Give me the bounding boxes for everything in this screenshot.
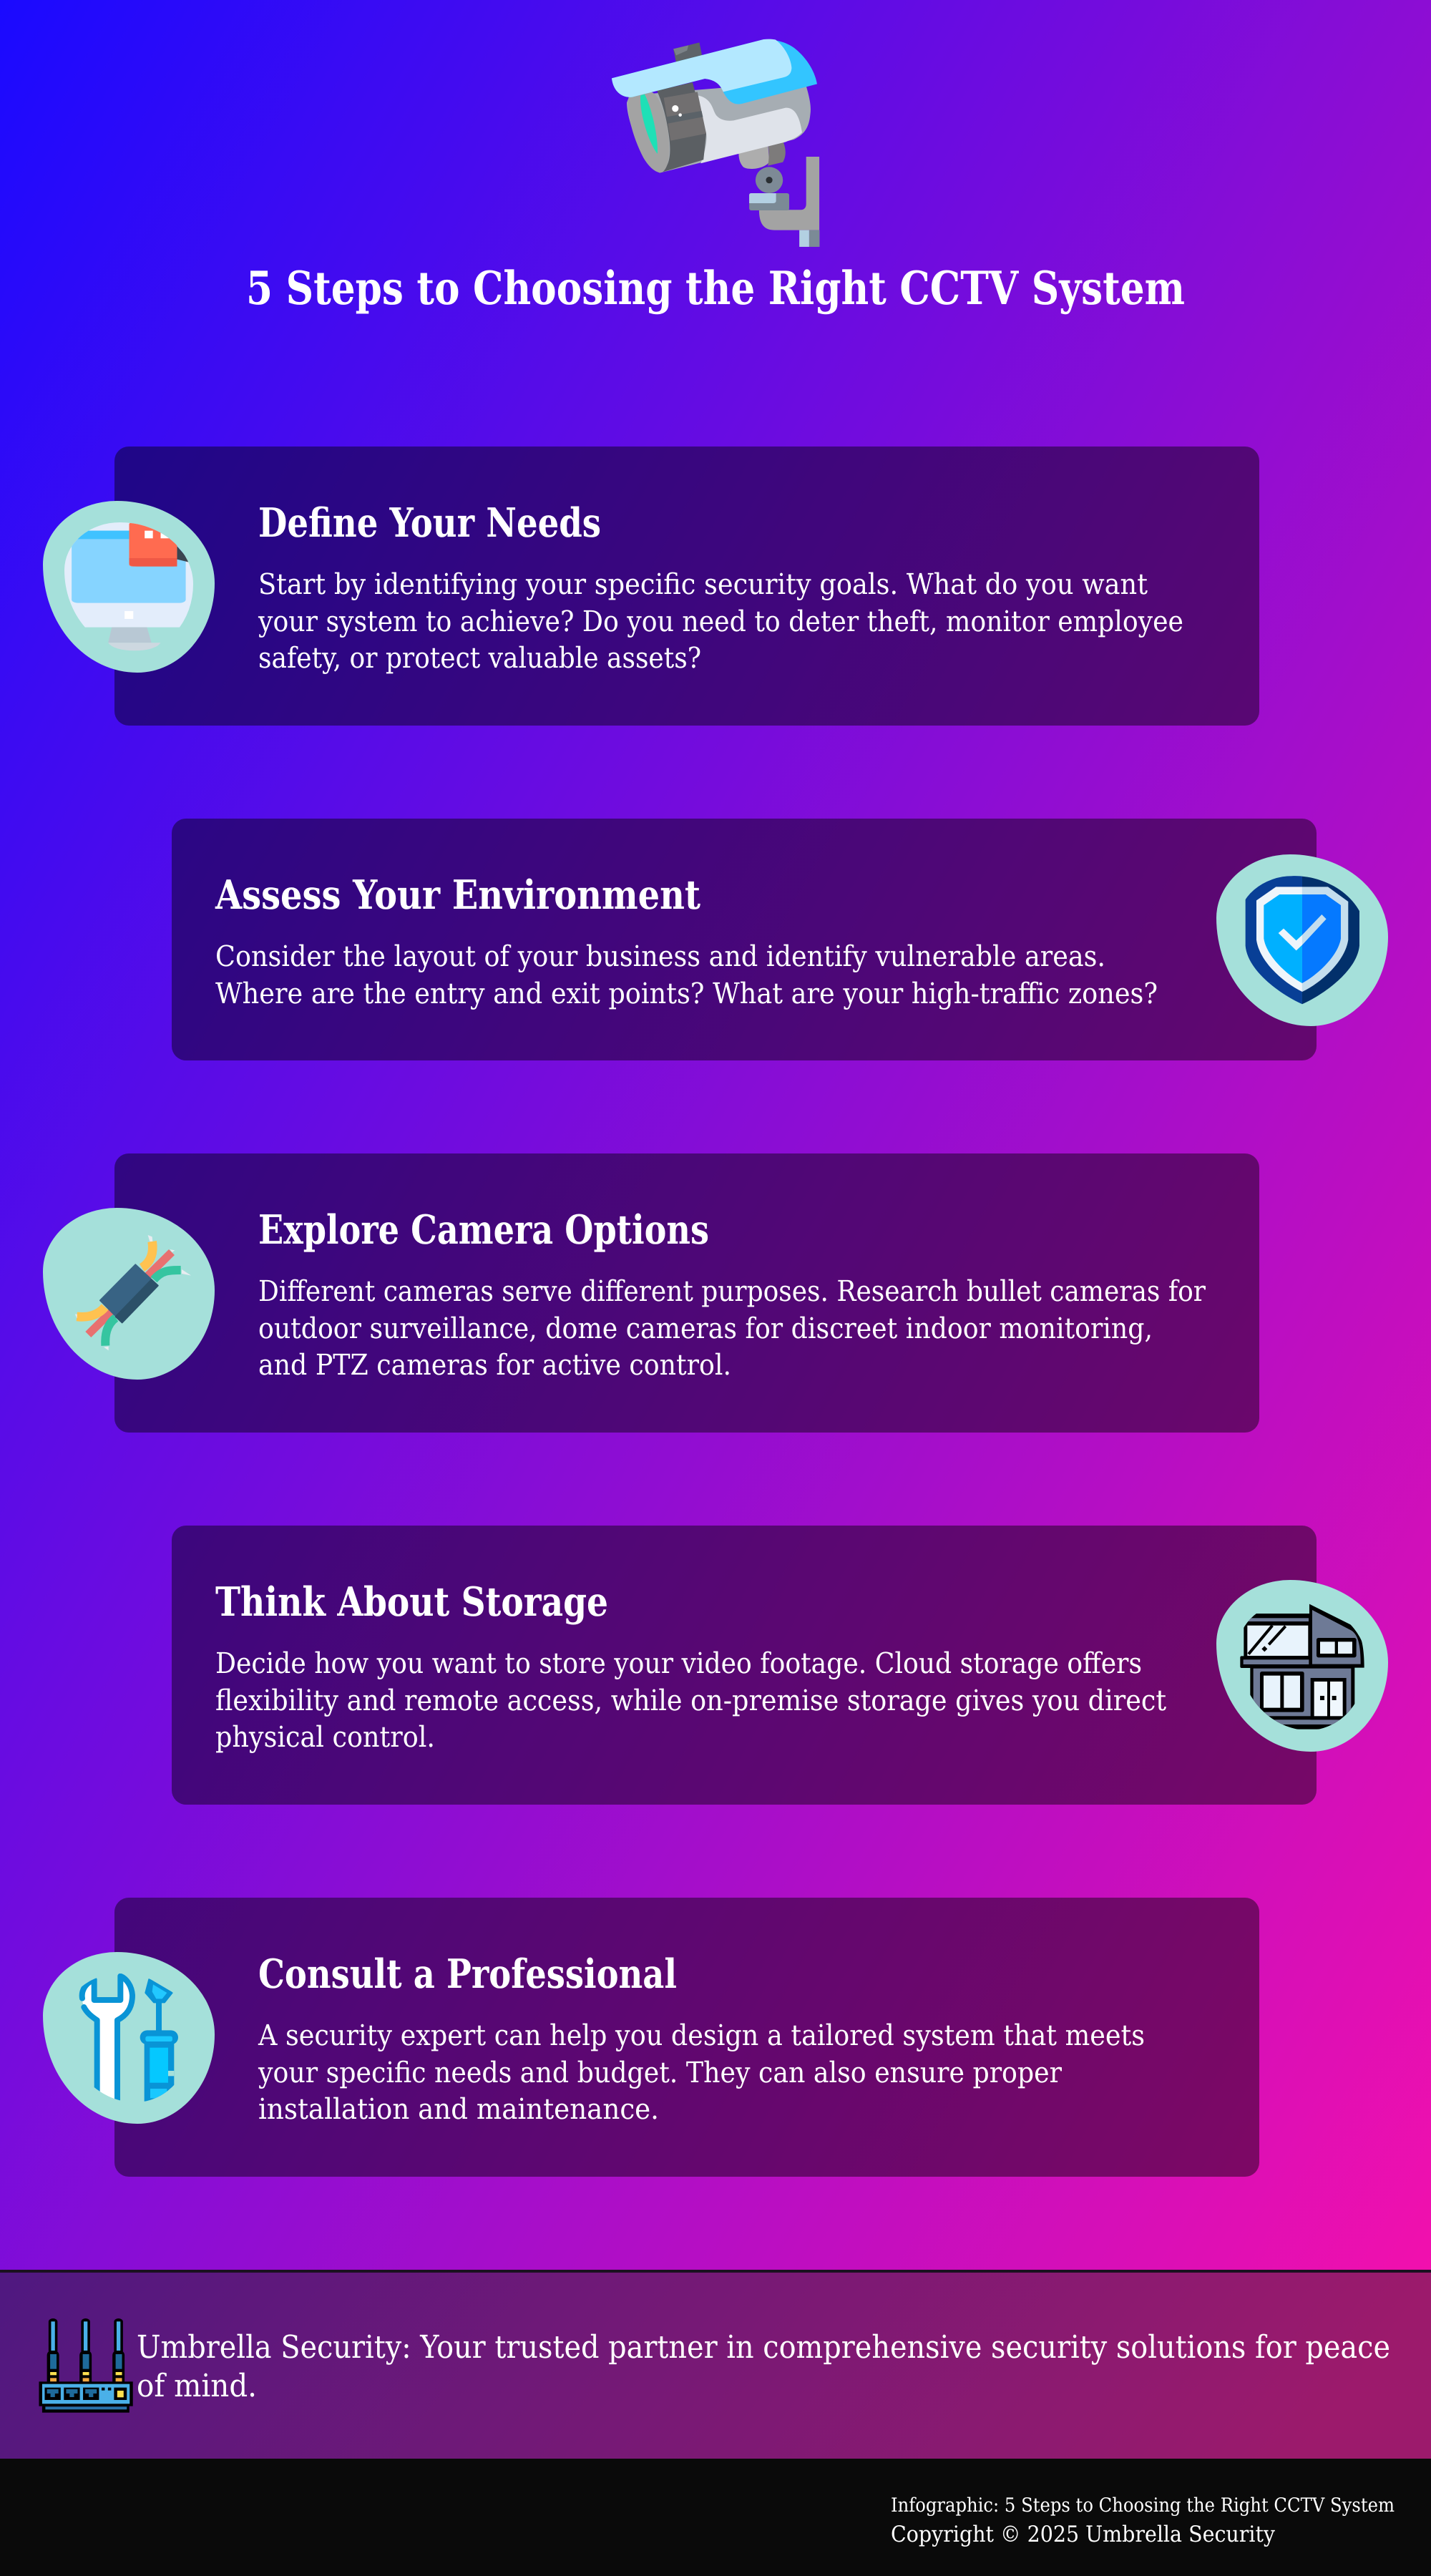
text block: define your needs: Start by identifying your specific security goals. What do you want xyxy=(258,568,1148,601)
title: 5 Steps to Choosing the Right CCTV System xyxy=(246,262,1185,316)
text block: assess your environment xyxy=(215,940,1158,1010)
panel: footer company band xyxy=(0,2270,1431,2459)
text block: consult a professional: installation and maintenance. xyxy=(258,2093,659,2126)
text block: copyright xyxy=(891,2494,1395,2547)
text block: define your needs xyxy=(258,568,1183,675)
icon: bundled wires xyxy=(43,1208,215,1380)
text block: define your needs: safety, or protect valuable assets? xyxy=(258,642,701,675)
text block: assess your environment: Consider the layout of your business and identify vulnerable areas. xyxy=(215,940,1105,973)
text block: consult a professional xyxy=(258,2019,1145,2126)
icon: monitor with alert tag xyxy=(43,501,215,673)
icon: CCTV camera xyxy=(612,39,819,247)
icon: building xyxy=(1216,1580,1388,1752)
heading: define your needs: Define Your Needs xyxy=(258,499,601,547)
heading: think about storage: Think About Storage xyxy=(215,1579,608,1626)
text block: explore camera options xyxy=(258,1275,1206,1382)
text block: explore camera options: Different cameras serve different purposes. Research bullet cameras for xyxy=(258,1275,1206,1308)
heading: assess your environment: Assess Your Environment xyxy=(215,872,700,919)
text block: copyright: Copyright © 2025 Umbrella Security xyxy=(891,2522,1275,2547)
panel: copyright footer xyxy=(0,2459,1431,2576)
panel: step 5 consult a professional xyxy=(43,1898,1259,2177)
text block: define your needs: your system to achieve? Do you need to deter theft, monitor employee xyxy=(258,605,1183,638)
text block: company statement: of mind. xyxy=(137,2368,257,2404)
text block: think about storage: physical control. xyxy=(215,1721,435,1754)
text block: think about storage: Decide how you want to store your video footage. Cloud storage offers xyxy=(215,1647,1142,1680)
text block: assess your environment: Where are the entry and exit points? What are your high-traffic zones? xyxy=(215,977,1158,1010)
panel: step 1 define your needs xyxy=(43,447,1259,726)
text block: consult a professional: your specific needs and budget. They can also ensure proper xyxy=(258,2057,1063,2089)
panel: step 3 explore camera options xyxy=(43,1153,1259,1433)
text block: explore camera options: and PTZ cameras for active control. xyxy=(258,1349,731,1382)
text block: explore camera options: outdoor surveillance, dome cameras for discreet indoor monitoring, xyxy=(258,1312,1153,1345)
heading: consult a professional: Consult a Professional xyxy=(258,1951,677,1998)
icon: router xyxy=(39,2318,133,2413)
text block: company statement xyxy=(137,2329,1390,2404)
text block: consult a professional: A security expert can help you design a tailored system that meets xyxy=(258,2019,1145,2052)
heading: explore camera options: Explore Camera Options xyxy=(258,1206,709,1254)
icon: shield with check xyxy=(1216,854,1388,1026)
icon: wrench and screwdriver xyxy=(43,1952,215,2124)
text block: think about storage xyxy=(215,1647,1166,1754)
panel: step 4 think about storage xyxy=(172,1526,1388,1805)
panel: step 2 assess your environment xyxy=(172,819,1388,1060)
text block: think about storage: flexibility and remote access, while on-premise storage gives you direct xyxy=(215,1684,1166,1717)
